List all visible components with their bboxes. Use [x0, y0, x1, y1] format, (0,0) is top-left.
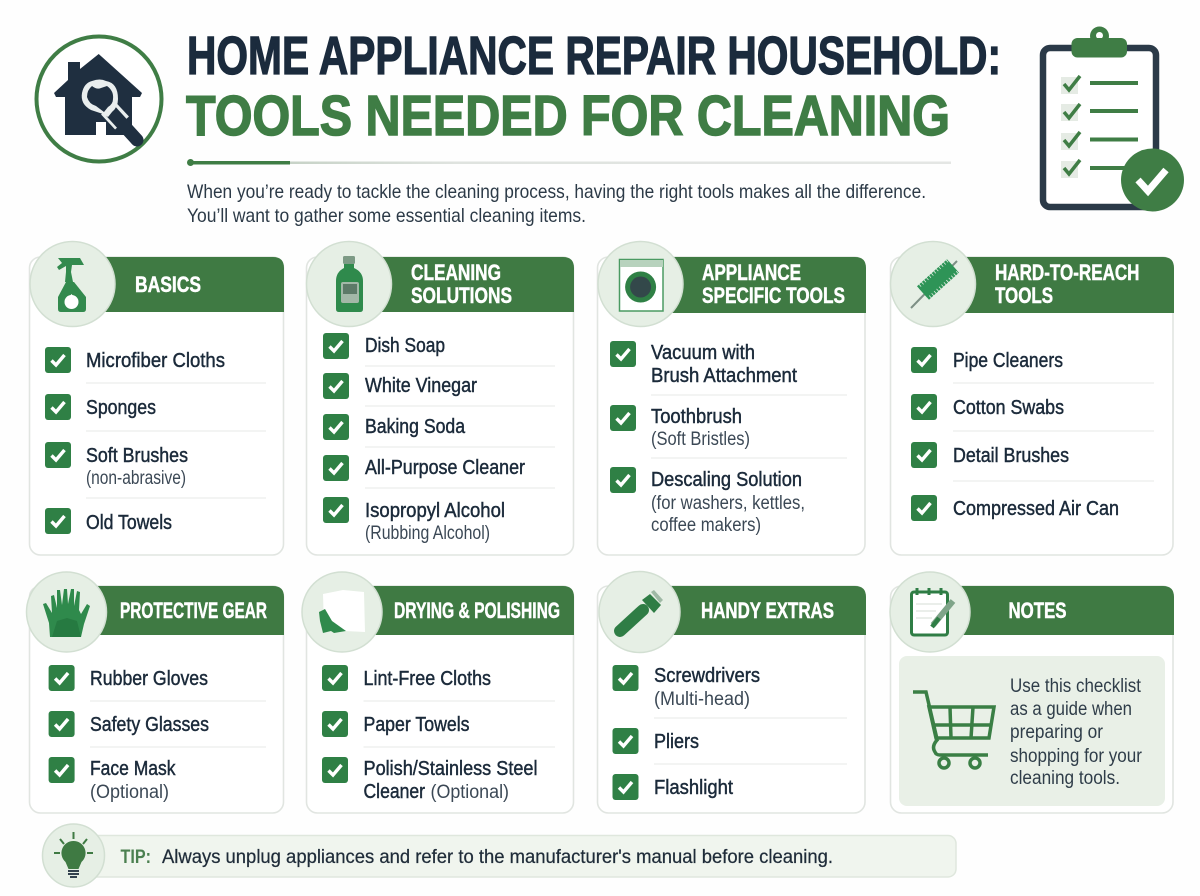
item: All-Purpose Cleaner: All-Purpose Cleaner — [365, 457, 525, 479]
item: Polish/Stainless Steel Cleaner: (Optional) — [430, 782, 509, 803]
item: Paper Towels: Paper Towels — [364, 714, 470, 736]
icon: detail brush — [890, 242, 976, 326]
item: White Vinegar — [323, 373, 477, 399]
item: Screwdrivers: (Multi-head) — [654, 689, 750, 710]
header: protective gear — [66, 586, 284, 635]
item: Isopropyl Alcohol — [323, 497, 505, 544]
tip bar — [42, 824, 956, 887]
panel: drying and polishing — [302, 572, 574, 813]
header: appliance specific tools: SPECIFIC TOOLS — [702, 283, 845, 308]
item: Baking Soda: Baking Soda — [365, 416, 466, 438]
item: Pipe Cleaners: Pipe Cleaners — [953, 350, 1063, 372]
item: Isopropyl Alcohol: Isopropyl Alcohol — [365, 500, 505, 522]
icon: washing machine — [598, 242, 683, 326]
intro text: When you’re ready to tackle the cleaning process, having the right tools makes all the difference. — [187, 181, 926, 203]
panel: cleaning solutions — [306, 242, 574, 555]
icon: notepad and pen — [890, 572, 970, 652]
item: Polish/Stainless Steel Cleaner: Cleaner — [364, 781, 425, 803]
item: Compressed Air Can — [911, 495, 1119, 521]
item: Screwdrivers: Screwdrivers — [654, 665, 760, 687]
item: Pipe Cleaners — [911, 347, 1063, 373]
item: Old Towels — [45, 508, 172, 534]
notes text — [1010, 676, 1143, 789]
header: notes: NOTES — [1008, 598, 1066, 623]
header: appliance specific tools — [640, 257, 866, 313]
item: Toothbrush: Toothbrush — [651, 406, 742, 428]
header: basics — [72, 257, 284, 312]
header: hard-to-reach tools: HARD-TO-REACH — [995, 260, 1140, 285]
tip text: Always unplug appliances and refer to the manufacturer's manual before cleaning. — [162, 846, 833, 868]
header: drying and polishing: DRYING & POLISHING — [394, 598, 560, 623]
item: Polish/Stainless Steel Cleaner — [322, 757, 538, 803]
item: Descaling Solution — [610, 467, 805, 536]
icon: spray bottle — [30, 242, 115, 326]
item: Toothbrush — [610, 405, 750, 450]
item: Dish Soap: Dish Soap — [365, 335, 445, 357]
item: Soft Brushes: (non-abrasive) — [86, 468, 186, 489]
item: Face Mask: Face Mask — [90, 758, 176, 780]
panel: hard-to-reach tools — [890, 242, 1174, 555]
logo: house with wrench — [36, 36, 162, 162]
icon: cloth and paper towel — [302, 572, 382, 652]
item: Soft Brushes — [45, 442, 188, 489]
header: cleaning solutions — [349, 257, 574, 312]
header: handy extras — [640, 586, 866, 635]
item: Pliers — [612, 728, 699, 754]
item: Vacuum with Brush Attachment: Vacuum with — [651, 342, 755, 364]
icon: shopping cart — [913, 692, 994, 768]
item: Detail Brushes: Detail Brushes — [953, 445, 1069, 467]
header: notes — [930, 586, 1174, 635]
panel: basics — [30, 242, 284, 555]
notes text: shopping for your — [1010, 746, 1143, 767]
notes text: preparing or — [1010, 722, 1104, 743]
panel: notes — [890, 572, 1174, 813]
item: Paper Towels — [322, 711, 470, 737]
notes box — [899, 656, 1165, 806]
header: handy extras: HANDY EXTRAS — [701, 598, 834, 623]
item: Flashlight — [612, 774, 733, 800]
item: Cotton Swabs: Cotton Swabs — [953, 397, 1064, 419]
header: hard-to-reach tools: TOOLS — [995, 283, 1053, 308]
header: hard-to-reach tools — [933, 257, 1174, 313]
icon: light bulb — [42, 824, 104, 887]
item: Descaling Solution: coffee makers) — [651, 515, 761, 536]
item: Face Mask — [49, 757, 176, 803]
item: Soft Brushes: Soft Brushes — [86, 445, 188, 467]
item: Lint-Free Cloths — [322, 665, 491, 691]
item: Microfiber Cloths — [45, 347, 225, 373]
item: Microfiber Cloths: Microfiber Cloths — [86, 350, 225, 372]
tip text: TIP: — [120, 846, 151, 868]
notes text: as a guide when — [1010, 699, 1132, 720]
item: All-Purpose Cleaner — [323, 455, 525, 481]
title: TOOLS NEEDED FOR CLEANING — [186, 84, 950, 148]
item: Detail Brushes — [911, 442, 1069, 468]
icon: bottle — [306, 242, 392, 326]
header: protective gear: PROTECTIVE GEAR — [120, 598, 267, 623]
header: cleaning solutions: SOLUTIONS — [411, 283, 512, 308]
item: Pliers: Pliers — [654, 731, 699, 753]
item: Isopropyl Alcohol: (Rubbing Alcohol) — [365, 523, 490, 544]
item: Rubber Gloves: Rubber Gloves — [90, 668, 208, 690]
header: cleaning solutions: CLEANING — [411, 260, 501, 285]
header: basics: BASICS — [135, 272, 201, 297]
item: Safety Glasses — [49, 711, 209, 737]
intro text: You’ll want to gather some essential cleaning items. — [187, 205, 586, 227]
item: Cotton Swabs — [911, 394, 1064, 420]
title divider — [187, 159, 951, 166]
item: Vacuum with Brush Attachment — [610, 341, 797, 387]
item: Safety Glasses: Safety Glasses — [90, 714, 209, 736]
item: Rubber Gloves — [49, 665, 208, 691]
item: Flashlight: Flashlight — [654, 777, 733, 799]
item: Face Mask: (Optional) — [90, 782, 169, 803]
item: White Vinegar: White Vinegar — [365, 375, 477, 397]
notes text: cleaning tools. — [1010, 768, 1120, 789]
item: Dish Soap — [323, 333, 445, 359]
notes text: Use this checklist — [1010, 676, 1142, 697]
title — [186, 26, 1001, 148]
icon: clipboard checklist — [1043, 26, 1184, 212]
item: Compressed Air Can: Compressed Air Can — [953, 498, 1119, 520]
item: Lint-Free Cloths: Lint-Free Cloths — [364, 668, 491, 690]
item: Screwdrivers — [612, 665, 760, 710]
intro text — [187, 181, 926, 227]
item: Descaling Solution: (for washers, kettles, — [651, 493, 805, 514]
panel: protective gear — [26, 572, 284, 813]
header: drying and polishing — [342, 586, 574, 635]
item: Vacuum with Brush Attachment: Brush Attachment — [651, 365, 797, 387]
panel: appliance specific tools — [598, 242, 866, 555]
header: appliance specific tools: APPLIANCE — [702, 260, 801, 285]
item: Old Towels: Old Towels — [86, 512, 172, 534]
item: Descaling Solution: Descaling Solution — [651, 469, 802, 491]
item: Sponges — [45, 394, 156, 420]
item: Toothbrush: (Soft Bristles) — [651, 429, 750, 450]
item: Polish/Stainless Steel Cleaner: Polish/Stainless Steel — [364, 758, 538, 780]
item: Baking Soda — [323, 414, 466, 440]
panel: handy extras — [598, 572, 866, 813]
icon: rubber gloves — [26, 572, 106, 652]
item: Sponges: Sponges — [86, 397, 156, 419]
icon: flashlight — [599, 572, 680, 652]
